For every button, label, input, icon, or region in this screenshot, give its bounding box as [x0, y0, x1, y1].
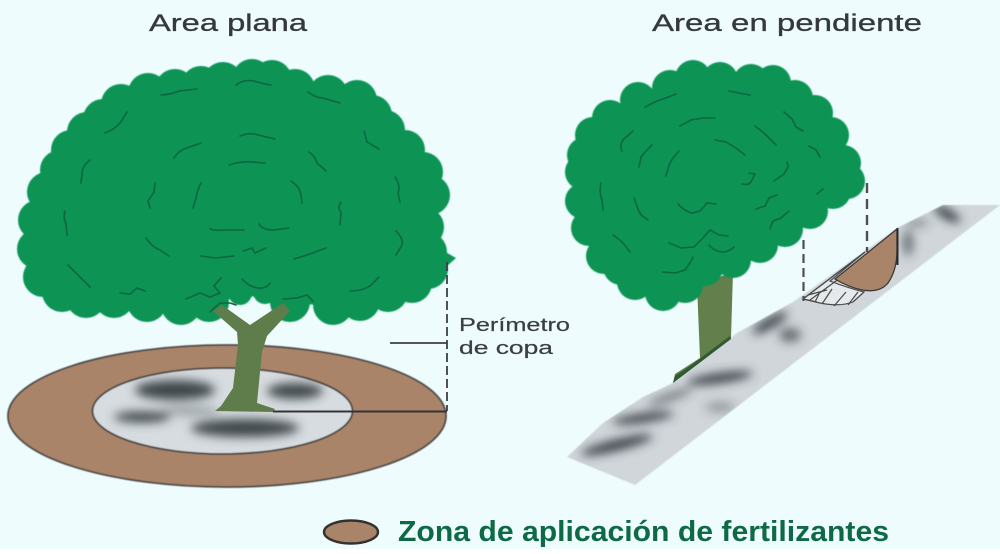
slope fertilizer trench — [803, 228, 898, 306]
label pointer — [390, 342, 447, 344]
crown — [17, 59, 456, 325]
heading: Area plana: Area plana — [149, 10, 308, 37]
heading: Area en pendiente: Area en pendiente — [652, 10, 922, 37]
label: Perímetro de copa: de copa — [459, 338, 554, 358]
legend label: Zona de aplicación de fertilizantes — [398, 516, 889, 548]
legend swatch — [324, 520, 378, 544]
crown perimeter dashed line — [446, 262, 448, 411]
radius line — [273, 410, 447, 412]
label: Perímetro de copa: Perímetro — [459, 315, 570, 335]
trunk — [673, 272, 733, 383]
slope dashed perimeter right — [866, 183, 868, 252]
brown trench fill — [835, 229, 897, 291]
leaf marks — [600, 91, 823, 273]
crown — [565, 60, 865, 311]
flat area tree — [17, 59, 456, 412]
hatched strip — [803, 252, 873, 306]
label: Perímetro de copa — [459, 315, 570, 358]
slope tree — [565, 60, 865, 383]
trunk base shadow — [673, 336, 731, 383]
inner grey ground — [92, 368, 352, 454]
brown fertilizer ring — [8, 345, 446, 487]
trunk — [213, 303, 290, 412]
slope dashed perimeter left — [802, 240, 805, 301]
flat area ground diagram — [8, 345, 446, 487]
slope ground strip — [567, 202, 1000, 485]
leaf marks — [64, 80, 402, 312]
